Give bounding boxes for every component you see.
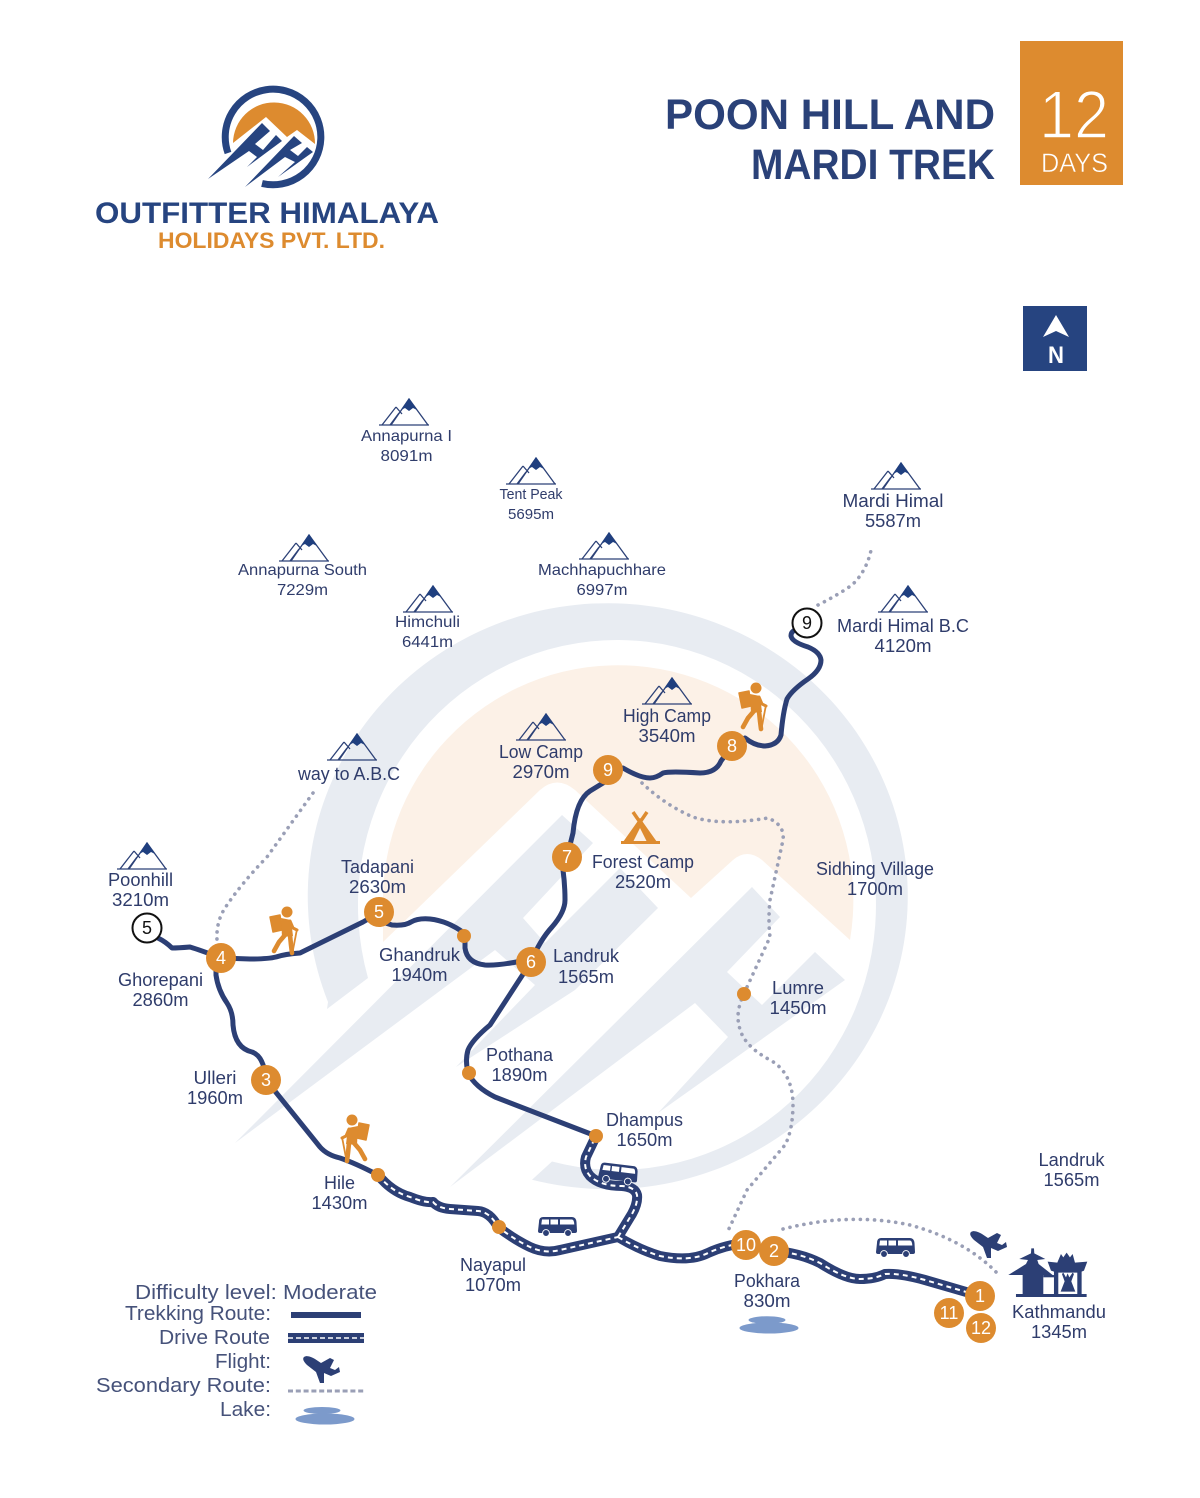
legend text: Drive Route [159,1327,270,1349]
legend text [96,1282,377,1421]
logo sun [233,102,315,144]
place labels: Dhampus [606,1110,683,1130]
place labels: 1430m [312,1193,368,1213]
place labels: 8091m [380,448,432,465]
place labels: 6441m [402,634,453,651]
duration badge: 12 [1039,77,1109,153]
place labels: Annapurna I [361,428,452,445]
place labels: Kathmandu [1012,1302,1106,1322]
place labels: 7229m [277,582,328,599]
watermark right mountain [450,887,845,1187]
legend text: Lake: [220,1399,271,1421]
place labels: Sidhing Village [816,859,934,879]
place labels: way to A.B.C [297,764,400,784]
logo peaks [208,123,313,187]
watermark sun [383,665,853,942]
legend text: Secondary Route: [96,1375,271,1397]
place labels: Tadapani [341,857,414,877]
place labels: Poonhill [108,870,173,890]
title [665,91,995,189]
legend [96,1282,377,1424]
icon: bus near Nayapul [538,1217,577,1236]
place labels: Machhapuchhare [538,562,666,579]
place labels: Pokhara [734,1271,801,1291]
duration badge [1020,41,1123,185]
place labels: 4120m [874,636,932,656]
place labels: Annapurna South [238,562,367,579]
place labels: Tent Peak [500,486,563,503]
legend text: Flight: [215,1351,271,1373]
side-trip markers: 5 [142,918,152,938]
north arrow [1023,306,1087,371]
place labels: 830m [744,1291,790,1311]
place labels: Mardi Himal [842,491,944,511]
day markers: 6 [526,952,536,972]
watermark ring [308,603,908,1189]
day markers: 1 [975,1286,985,1306]
place labels: 5587m [865,511,921,531]
legend text: Trekking Route: [125,1303,271,1325]
day markers: 11 [940,1303,958,1323]
waypoint dots [371,929,751,1234]
place labels: 1700m [847,879,903,899]
day markers: 10 [736,1235,756,1255]
day markers [206,731,996,1343]
place labels: 2970m [512,762,570,782]
place labels: Ulleri [194,1068,236,1088]
place labels: 6997m [576,582,628,599]
watermark left mountain [235,815,658,1143]
flight path [783,1219,997,1273]
drive routes [378,1136,980,1296]
place labels: 1565m [558,967,614,987]
logo subtitle: HOLIDAYS PVT. LTD. [158,228,385,253]
place labels: Forest Camp [592,852,694,872]
place labels: Himchuli [395,614,460,631]
day markers: 3 [261,1070,271,1090]
place labels: Hile [324,1173,355,1193]
place labels: Low Camp [499,742,583,762]
icon: plane [970,1231,1007,1258]
place labels: 1650m [616,1130,672,1150]
logo name: OUTFITTER HIMALAYA [95,197,439,230]
place labels: 1070m [465,1275,521,1295]
place labels: 5695m [508,506,554,523]
legend: trekking route [291,1312,361,1318]
north arrow: N [1048,342,1064,369]
place labels: 1565m [1044,1170,1100,1190]
logo ring [225,89,321,185]
icon: hiker near High Camp [739,682,766,731]
place labels: 3540m [638,726,696,746]
place labels: High Camp [623,706,711,726]
icon: Pokhara lake [740,1316,798,1334]
title: POON HILL AND [665,91,995,139]
place labels: 2630m [349,877,406,897]
place labels: Landruk [553,946,620,966]
icon: bus near Pokhara [876,1238,915,1257]
icon: hiker near Tadapani [270,906,297,955]
place labels: 1890m [492,1065,548,1085]
place labels: 3210m [112,890,169,910]
place labels [108,428,1106,1342]
duration badge: DAYS [1041,148,1108,178]
legend: flight [303,1356,340,1383]
secondary routes [217,545,872,1233]
legend text: Difficulty level: Moderate [135,1282,377,1304]
icon: Kathmandu temple [1008,1248,1087,1297]
place labels: 1450m [770,998,826,1018]
place labels: Landruk [1038,1150,1105,1170]
day markers: 7 [562,847,572,867]
place labels: 1960m [187,1088,243,1108]
day markers: 12 [971,1318,991,1338]
place labels: Ghandruk [379,945,461,965]
day markers: 2 [769,1241,779,1261]
legend: drive route [288,1333,364,1343]
place labels: Mardi Himal B.C [837,616,969,636]
place labels: 2520m [615,872,671,892]
icon: hiker near Hile [342,1114,369,1163]
day markers: 8 [727,736,737,756]
day markers: 9 [603,760,613,780]
legend: lake [296,1407,354,1424]
place labels: Ghorepani [118,970,203,990]
place labels: 1345m [1031,1322,1087,1342]
place labels: Lumre [772,978,824,998]
side-trip markers: 9 [802,613,812,633]
trekking routes [158,630,821,1175]
place labels: 2860m [132,990,188,1010]
mountain icons [117,398,928,869]
day markers: 5 [374,902,384,922]
place labels: 1940m [392,965,448,985]
title: MARDI TREK [751,141,995,189]
icon: bus near Dhampus [598,1162,639,1186]
background watermark: compass ring, sun and mountains [235,603,908,1189]
side-trip markers [132,608,822,942]
icon: forest camp tent [621,812,660,844]
day markers: 4 [216,948,226,968]
logo [95,89,439,253]
legend: secondary route [288,1390,366,1392]
place labels: Pothana [486,1045,554,1065]
place labels: Nayapul [460,1255,526,1275]
